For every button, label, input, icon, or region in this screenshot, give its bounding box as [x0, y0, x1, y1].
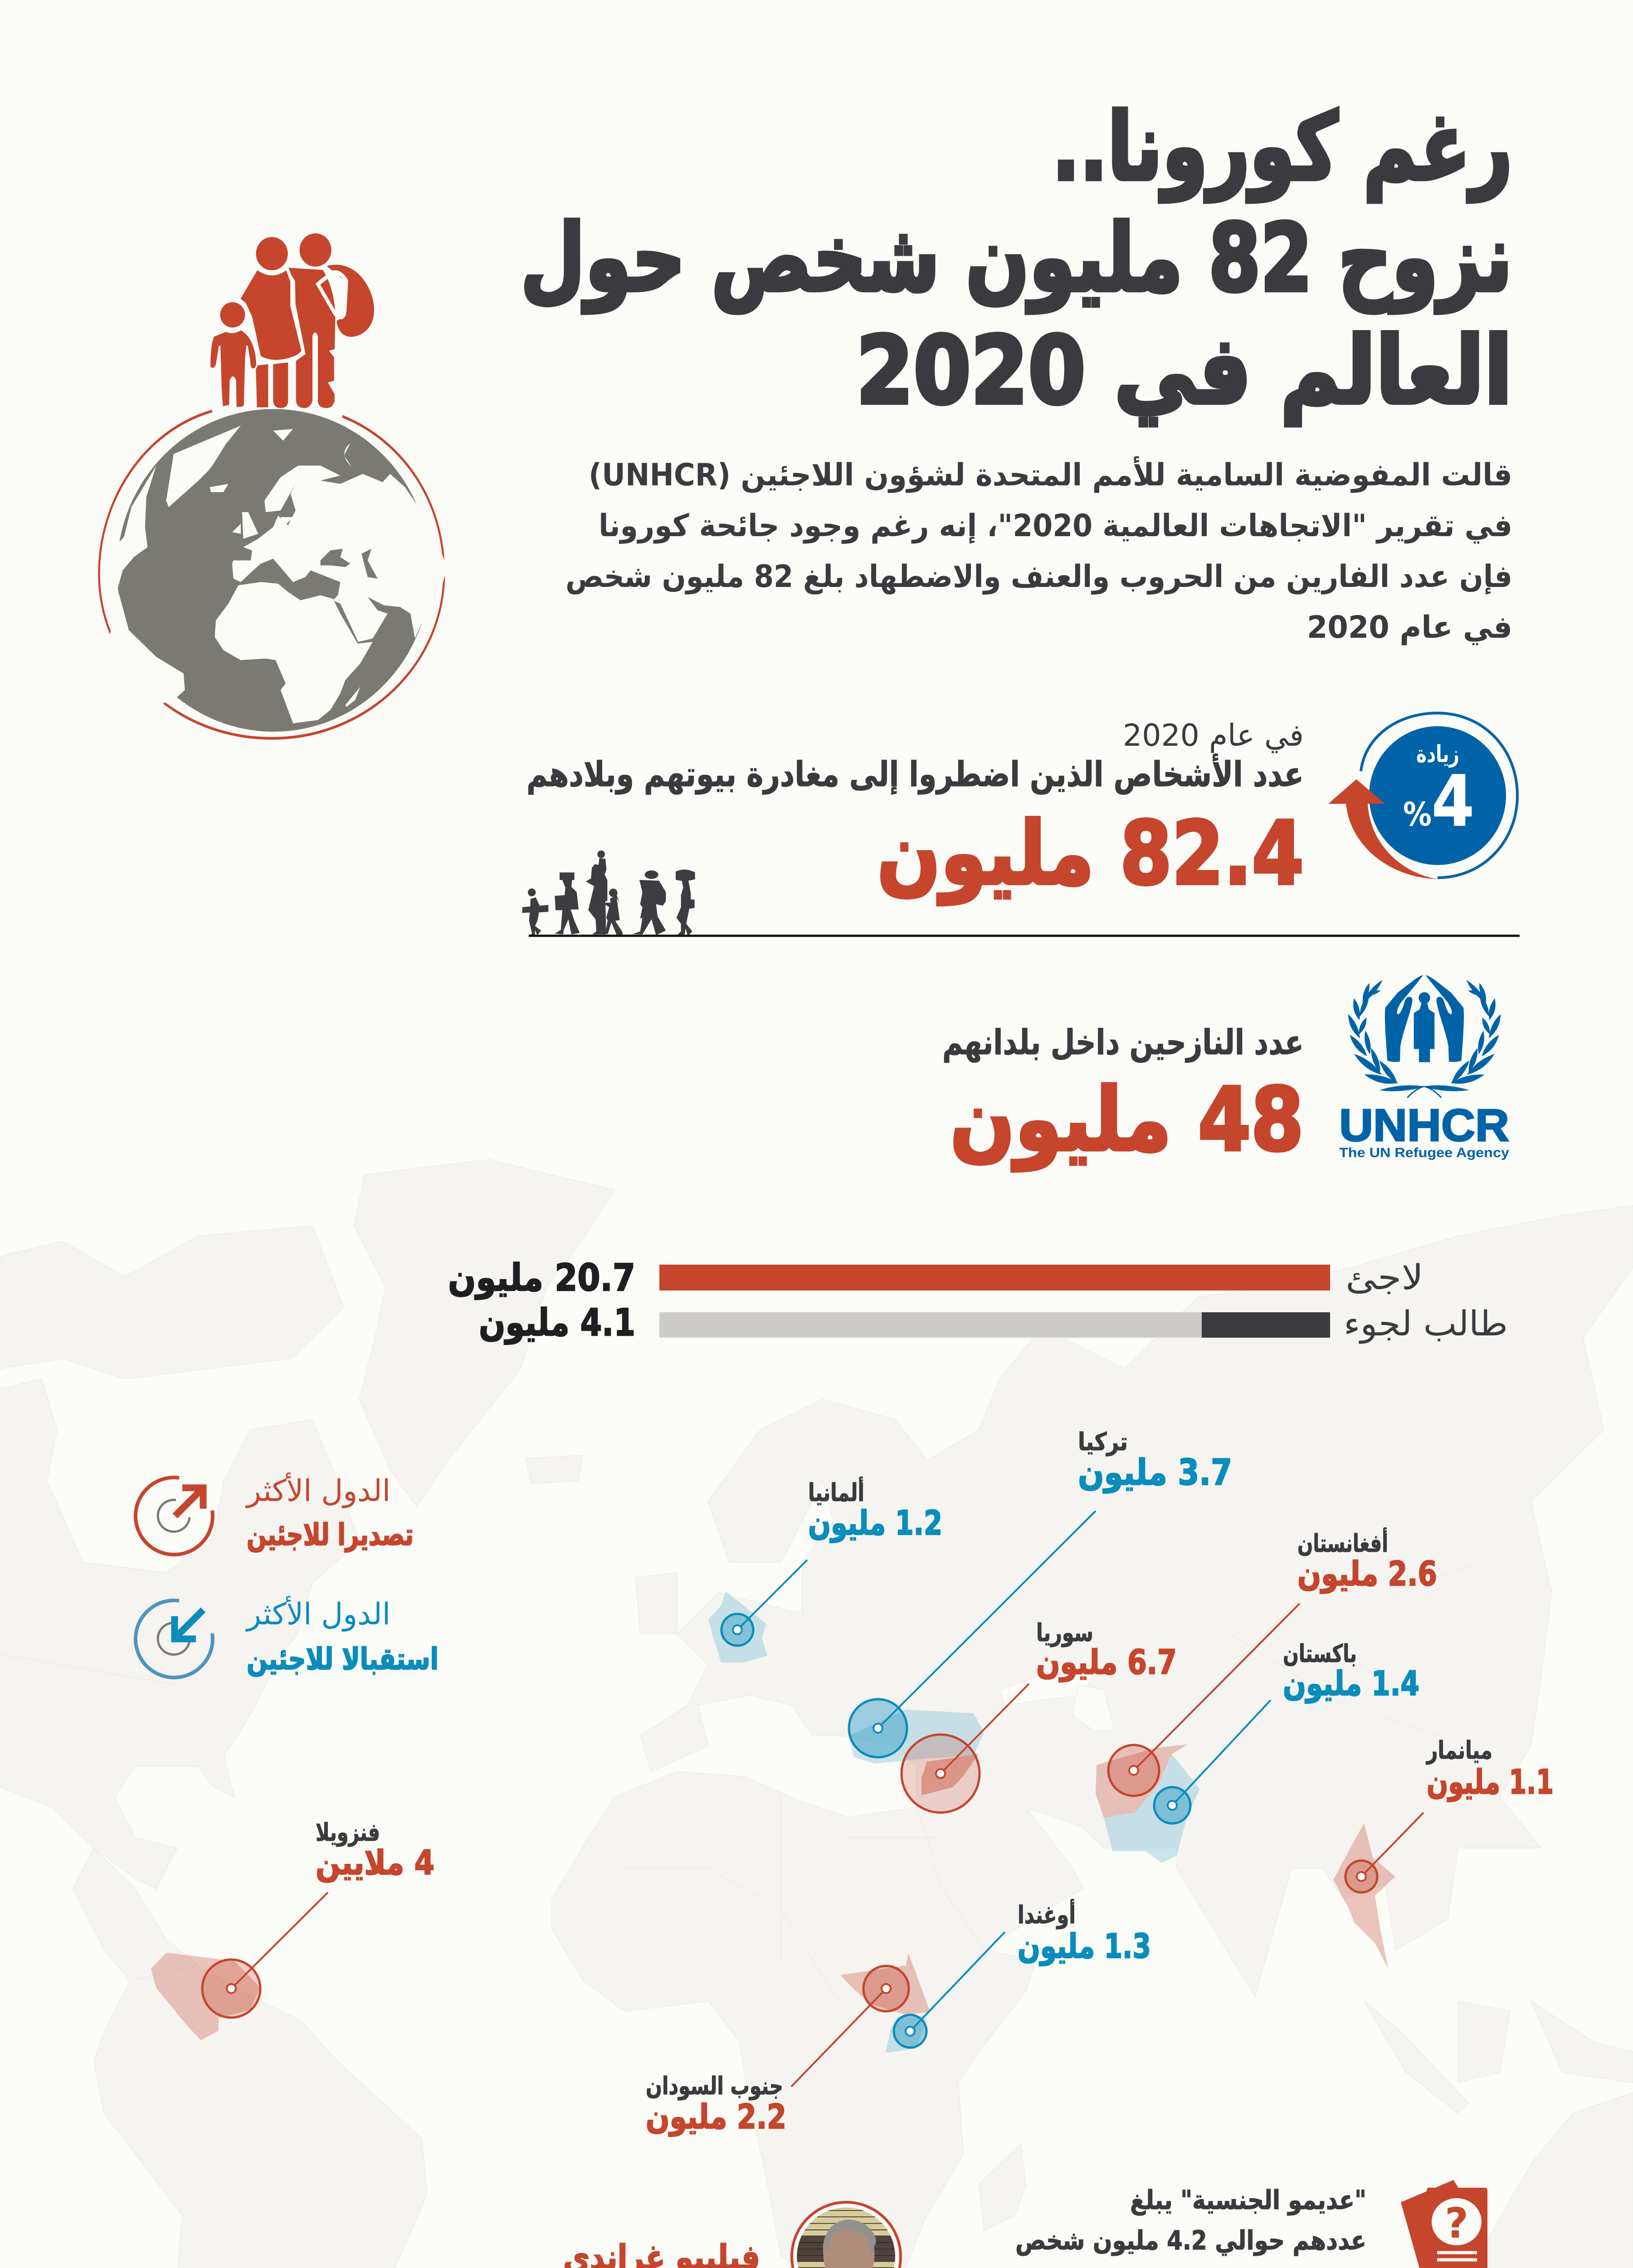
legend: top hosts: الدول الأكثر	[245, 1595, 390, 1632]
intro paragraph: في تقرير "الاتجاهات العالمية 2020"، إنه رغم وجود جائحة كورونا	[599, 508, 1512, 544]
marker: Myanmar	[1333, 1736, 1554, 1969]
stat: internally displaced: عدد النازحين داخل بلدانهم	[942, 1022, 1304, 1063]
marker: Turkey	[849, 1427, 1232, 1764]
title: رغم كورونا..	[1052, 93, 1512, 202]
marker: Venezuela	[151, 1818, 434, 2040]
marker: Germany	[708, 1476, 942, 1662]
legend: top exporters	[136, 1472, 414, 1554]
badge: 4% increase	[1328, 713, 1517, 879]
marker: Uganda: أوغندا	[1018, 1899, 1076, 1929]
intro paragraph: قالت المفوضية السامية للأمم المتحدة لشؤون اللاجئين (UNHCR)	[589, 456, 1512, 493]
intro paragraph: في عام 2020	[1307, 610, 1512, 645]
marker: Syria	[902, 1618, 1177, 1813]
stat: people forced to flee: في عام 2020	[1123, 718, 1304, 753]
legend: top hosts	[136, 1595, 439, 1677]
marker: Pakistan: 1.4 مليون	[1283, 1664, 1419, 1704]
stat: people forced to flee	[526, 718, 1304, 905]
marker: Uganda: 1.3 مليون	[1018, 1927, 1151, 1966]
marker: Afghanistan: 2.6 مليون	[1297, 1554, 1437, 1594]
UNHCR logo: The UN Refugee Agency	[1339, 1145, 1509, 1160]
legend: top hosts: استقبالا للاجئين	[247, 1642, 439, 1677]
refugees bar: 20.7 مليون	[448, 1256, 635, 1300]
marker: Venezuela: فنزويلا	[316, 1818, 380, 1847]
globe illustration	[99, 233, 447, 738]
portrait: Filippo Grandi	[792, 2202, 901, 2268]
UNHCR emblem	[1347, 975, 1502, 1098]
marker: Pakistan	[1104, 1639, 1419, 1863]
title	[521, 93, 1512, 425]
asylum seekers bar	[479, 1301, 1508, 1344]
fact: stateless people: "عديمو الجنسية" يبلغ	[1130, 2185, 1366, 2216]
globe outer ring	[99, 411, 444, 738]
stat: internally displaced: 48 مليون	[950, 1070, 1304, 1171]
intro paragraph	[565, 456, 1512, 645]
asylum seekers bar: 4.1 مليون	[479, 1301, 635, 1344]
badge: 4% increase: 4	[1432, 760, 1474, 842]
marker: Syria: سوريا	[1036, 1618, 1093, 1647]
marker: Afghanistan	[1096, 1527, 1437, 1818]
globe inland seas	[253, 549, 378, 599]
marker: Afghanistan: أفغانستان	[1297, 1527, 1388, 1558]
stat: people forced to flee: عدد الأشخاص الذين اضطروا إلى مغادرة بيوتهم وبلادهم	[526, 753, 1304, 795]
UNHCR logo	[1339, 975, 1509, 1160]
fact: stateless people	[1015, 2185, 1366, 2268]
globe ocean disc	[117, 409, 430, 732]
marker: South Sudan: 2.2 مليون	[646, 2097, 786, 2137]
asylum seekers bar: طالب لجوء	[1344, 1303, 1508, 1344]
marker: Uganda	[885, 1899, 1151, 2053]
UNHCR logo: UNHCR	[1339, 1100, 1509, 1151]
stat: people forced to flee: 82.4 مليون	[877, 803, 1304, 905]
globe land	[107, 425, 447, 723]
intro paragraph: فإن عدد الفارين من الحروب والعنف والاضطهاد بلغ 82 مليون شخص	[565, 559, 1512, 595]
refugees bar	[448, 1256, 1423, 1300]
refugees bar: لاجئ	[1345, 1257, 1423, 1297]
marker: Myanmar: 1.1 مليون	[1427, 1763, 1554, 1802]
icon: passport: ?	[1445, 2199, 1468, 2248]
legend: top exporters: تصديرا للاجئين	[247, 1517, 414, 1552]
baseline rule	[529, 934, 1520, 937]
icon: passport	[1401, 2180, 1487, 2268]
family icon	[210, 233, 374, 408]
marker: South Sudan: جنوب السودان	[646, 2072, 783, 2100]
badge: 4% increase: %	[1403, 795, 1432, 833]
marker: Turkey: 3.7 مليون	[1078, 1452, 1232, 1493]
title: العالم في 2020	[856, 317, 1512, 425]
marker: Myanmar: ميانمار	[1426, 1736, 1492, 1765]
refugee silhouettes	[522, 850, 695, 936]
legend: top exporters: الدول الأكثر	[245, 1472, 390, 1508]
marker: Venezuela: 4 ملايين	[316, 1843, 434, 1882]
marker: Turkey: تركيا	[1078, 1427, 1128, 1456]
world map background	[0, 1159, 1633, 2268]
title: نزوح 82 مليون شخص حول	[521, 205, 1512, 313]
marker: Germany: 1.2 مليون	[808, 1504, 942, 1543]
marker: Pakistan: باكستان	[1283, 1639, 1357, 1668]
marker: Germany: ألمانيا	[808, 1476, 864, 1507]
marker: South Sudan	[646, 1953, 930, 2137]
fact: stateless people: عددهم حوالي 4.2 مليون شخص	[1015, 2225, 1366, 2256]
badge: 4% increase: زيادة	[1416, 741, 1459, 768]
stat: internally displaced	[942, 1022, 1304, 1171]
bar chart: refugees and asylum seekers	[448, 1256, 1508, 1344]
marker: Syria: 6.7 مليون	[1036, 1643, 1177, 1682]
